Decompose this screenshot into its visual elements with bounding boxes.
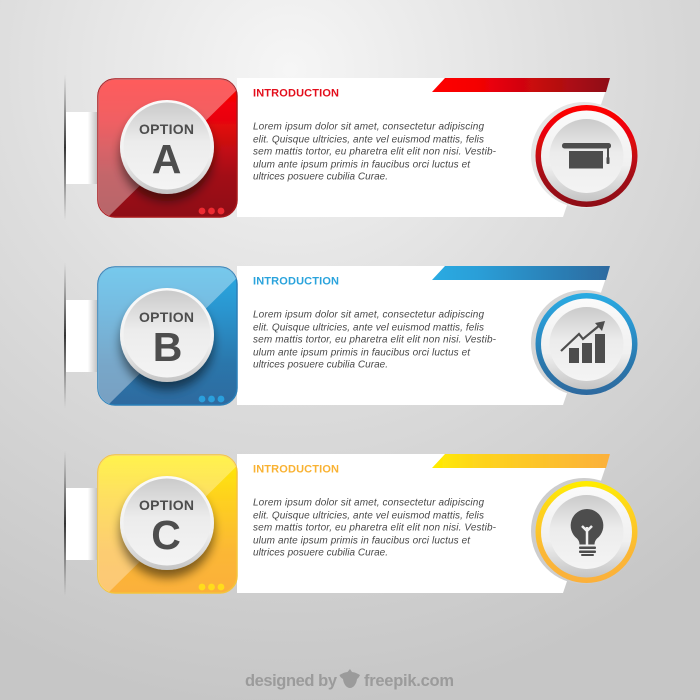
option badge A	[120, 100, 214, 194]
body text C: elit. Quisque ultricies, ante vel euismod mattis, felis	[253, 510, 484, 522]
icon ring B	[531, 290, 638, 396]
body text B: elit. Quisque ultricies, ante vel euismod mattis, felis	[253, 322, 484, 334]
panel: option B	[64, 263, 638, 408]
icon: growth chart	[561, 321, 605, 363]
body text B: ultrices posuere cubilia Curae.	[253, 360, 388, 370]
option badge B: OPTION	[139, 309, 194, 325]
side tab B	[64, 263, 97, 408]
panel: option C	[64, 451, 638, 596]
body text C: sem mattis tortor, eu pharetra elit elit non nisi. Vestib-	[253, 522, 497, 534]
option tile B	[98, 267, 248, 405]
body text B: Lorem ipsum dolor sit amet, consectetur adipiscing	[253, 310, 484, 320]
side tab A	[64, 75, 97, 220]
option tile C	[98, 455, 248, 593]
heading C: INTRODUCTION	[253, 464, 339, 476]
white banner A	[237, 78, 610, 217]
option badge C: OPTION	[139, 497, 194, 513]
panel: option A	[64, 75, 638, 220]
body text B	[253, 310, 497, 370]
white banner C	[237, 454, 610, 593]
icon ring C	[531, 478, 638, 584]
body text A	[253, 122, 497, 182]
header bar B	[432, 266, 610, 280]
body text B: sem mattis tortor, eu pharetra elit elit non nisi. Vestib-	[253, 334, 497, 346]
heading A: INTRODUCTION	[253, 88, 339, 100]
option badge A: OPTION	[139, 121, 194, 137]
body text B: ulum ante ipsum primis in faucibus orci luctus et	[253, 348, 471, 358]
heading B: INTRODUCTION	[253, 276, 339, 288]
body text C: Lorem ipsum dolor sit amet, consectetur adipiscing	[253, 498, 484, 508]
body text C	[253, 498, 497, 558]
body text A: sem mattis tortor, eu pharetra elit elit non nisi. Vestib-	[253, 146, 497, 158]
option badge B	[120, 288, 214, 382]
body text A: ulum ante ipsum primis in faucibus orci luctus et	[253, 160, 471, 170]
body text A: ultrices posuere cubilia Curae.	[253, 172, 388, 182]
body text A: elit. Quisque ultricies, ante vel euismod mattis, felis	[253, 134, 484, 146]
body text A: Lorem ipsum dolor sit amet, consectetur adipiscing	[253, 122, 484, 132]
icon: light bulb	[571, 509, 603, 556]
icon ring A	[531, 102, 638, 208]
option tile A	[98, 79, 248, 217]
option badge C	[120, 476, 214, 570]
side tab C	[64, 451, 97, 596]
icon: graduation cap	[562, 143, 611, 168]
body text C: ulum ante ipsum primis in faucibus orci luctus et	[253, 536, 471, 546]
watermark	[245, 669, 454, 690]
body text C: ultrices posuere cubilia Curae.	[253, 548, 388, 558]
option badge B: B	[153, 324, 182, 370]
option badge C: C	[151, 512, 181, 558]
white banner B	[237, 266, 610, 405]
watermark: designed by	[245, 672, 338, 690]
option badge A: A	[152, 136, 181, 182]
watermark: freepik.com	[364, 672, 454, 690]
header bar C	[432, 454, 610, 468]
header bar A	[432, 78, 610, 92]
